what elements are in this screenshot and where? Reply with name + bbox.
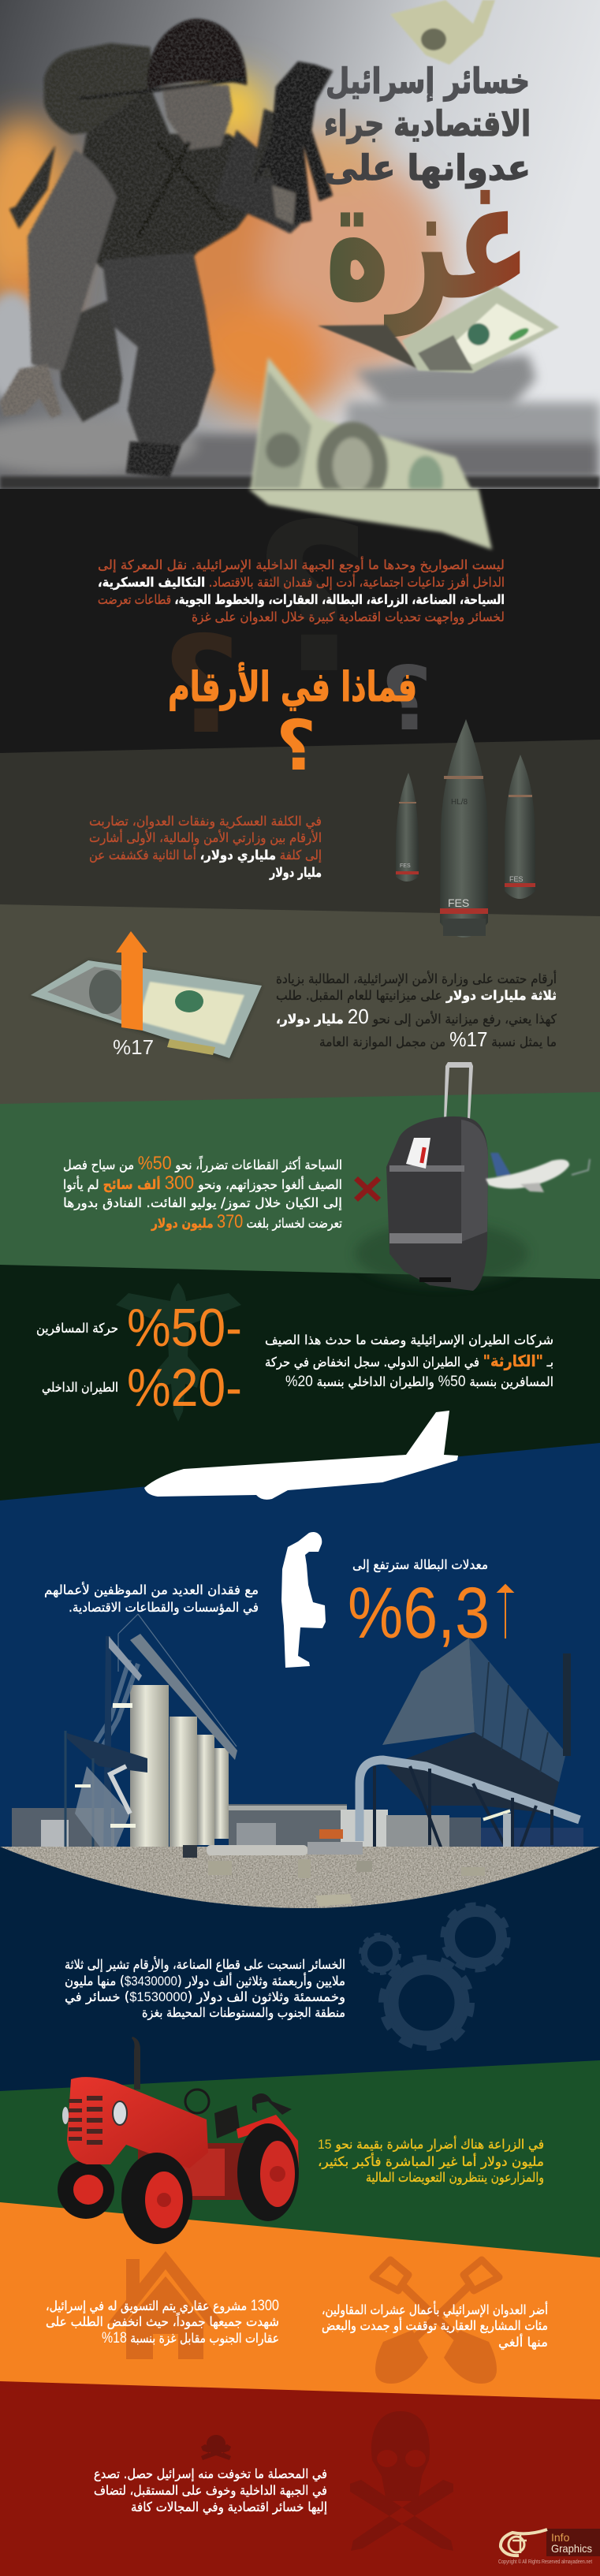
center pipes [183, 1829, 485, 1907]
heading: in numbers: فماذا في الأرقام [168, 662, 417, 711]
gear: top right [444, 1906, 507, 1969]
band: dark olive [0, 740, 600, 923]
stat: passengers -50%: %50- [127, 1298, 242, 1358]
stat: domestic -20%: %20- [127, 1358, 242, 1418]
text: industry: منطقة الجنوب والمستوطنات المحيطة بغزة [142, 2005, 345, 2021]
text: airlines [265, 1333, 553, 1390]
banknote: bottom [248, 356, 473, 489]
logo: infographics box [546, 2529, 600, 2556]
text: agriculture: والمزارعون ينتظرون التعويضات المالية [366, 2170, 544, 2186]
title [324, 62, 531, 336]
stat: domestic -20%: الطيران الداخلي [42, 1380, 118, 1396]
icon: up arrow [116, 931, 147, 1031]
band: navy [0, 1443, 600, 1853]
gear: small [361, 1935, 399, 1973]
text: agriculture [318, 2135, 544, 2186]
banknote: top [390, 0, 495, 65]
icon: gears [361, 1906, 507, 2046]
icon: ghost skull large [350, 2411, 453, 2551]
shell: center: HL/8 [451, 798, 468, 807]
text: conclusion: في المحصلة ما تخوفت منه إسرائيل حصل. تصدع [94, 2466, 327, 2482]
text: military cost: الأرقام بين وزارتي الأمن والمالية، الأولى أشارت [89, 829, 322, 846]
logo: infographics box: Graphics [551, 2542, 592, 2555]
band: olive [0, 904, 600, 1112]
band: dark red [0, 2381, 600, 2576]
banknote: bottom tail [248, 489, 492, 550]
stat: passengers -50%: حركة المسافرين [36, 1321, 118, 1336]
image: industrial plant [0, 1614, 600, 1908]
title: خسائر إسرائيل [326, 62, 530, 102]
text: airlines: شركات الطيران الإسرائيلية وصفت ما حدث هذا الصيف [265, 1333, 553, 1348]
text: real estate [46, 2298, 279, 2347]
icon: red tractor [58, 2037, 299, 2244]
shell: center [440, 719, 488, 938]
icon: question mark: ؟ [276, 705, 316, 786]
ground and smoke [0, 292, 600, 481]
band: green [0, 1092, 600, 1293]
gravel ground [0, 1847, 600, 1908]
shell: right: FES [509, 875, 524, 883]
shovel: right grip to left blade [375, 2260, 499, 2384]
shell: center: FES [448, 897, 469, 909]
tank [355, 355, 536, 406]
decorative question marks: ؟ [252, 481, 371, 719]
intro text: لخسائر وواجهت تحديات اقتصادية كبيرة خلال العدوان على غزة [192, 610, 505, 625]
band: forest green [0, 2060, 600, 2271]
shell: left [396, 773, 419, 882]
logo: calligraphic emblem [501, 2529, 547, 2555]
icon: thin up arrow [498, 1585, 512, 1638]
icon: flat banknote [31, 960, 262, 1061]
icon: white airplane [144, 1411, 458, 1500]
icon: artillery shells [396, 719, 535, 938]
text: employees: مع فقدان العديد من الموظفين لأعمالهم [44, 1582, 259, 1598]
intro text: السياحة، الصناعة، الزراعة، البطالة، العقارات، والخطوط الجوية، قطاعات تعرضت [98, 592, 505, 608]
shell: left: FES [400, 863, 411, 869]
right cooler [360, 1638, 580, 1855]
text: agriculture: في الزراعة هناك أضرار مباشرة بقيمة نحو 15 [318, 2135, 544, 2153]
icon: crossed shovels [373, 2260, 499, 2384]
icon: ghost plane [116, 1283, 241, 1422]
intro text: الداخل أفرز تداعيات اجتماعية، أدت إلى فقدان الثقة بالاقتصاد. التكاليف العسكرية، [98, 573, 505, 591]
text: tourism [63, 1153, 342, 1232]
text: real estate: 1300 مشروع عقاري يتم التسويق له في إسرائيل، [46, 2298, 279, 2314]
icon: ghost house [109, 2251, 222, 2359]
soldier [0, 19, 333, 477]
banknote: middle [318, 286, 559, 373]
text: industry: وخمسمئة وثلاثون الف دولار (1530000$) خسائر في [65, 1989, 345, 2005]
text: contractors: أضر العدوان الإسرائيلي بأعمال عشرات المقاولين، [322, 2301, 548, 2318]
text: budget [276, 970, 557, 1051]
intro text [98, 556, 505, 625]
explosion [0, 75, 445, 418]
icon: suitcase [355, 1062, 528, 1291]
stat: 6.3 percent: %6,3 [348, 1573, 490, 1653]
shell: right [505, 755, 535, 899]
text: military cost: مليار دولار [269, 865, 322, 881]
label: 17 percent: %17 [113, 1035, 154, 1059]
band: dark navy [0, 1847, 600, 2099]
background: black intro band [0, 0, 600, 788]
shovel: left grip to right blade [373, 2260, 497, 2384]
text: industry [65, 1956, 345, 2021]
title: عدوانها على [324, 148, 531, 188]
icon: sad man silhouette [281, 1532, 326, 1668]
text: real estate: عقارات الجنوب مقابل غزة بنسبة 18% [102, 2330, 279, 2347]
text: contractors [322, 2301, 548, 2350]
decorative question marks: ؟ [162, 608, 240, 764]
icon: airplane photo [486, 1153, 590, 1192]
text: employees: في المؤسسات والقطاعات الاقتصادية. [69, 1600, 259, 1616]
text: unemployment label: معدلات البطالة سترتفع إلى [352, 1557, 488, 1573]
background pipework [12, 1804, 583, 1851]
text: budget: أرقام حتمت على وزارة الأمن الإسرائيلية، المطالبة بزيادة [276, 970, 557, 987]
text: tourism: السياحة أكثر القطاعات تضرراً، نحو 50% من سياح فصل [63, 1153, 342, 1174]
text: conclusion: في الجبهة الداخلية وخوف على المستقبل، لتضاف [94, 2483, 327, 2499]
text: conclusion: إليها خسائر اقتصادية وفي المجالات كافة [131, 2500, 327, 2515]
decorative question marks [162, 481, 432, 764]
text: tourism: إلى الكيان خلال تموز/ يوليو الفائت. الفنادق بدورها [63, 1195, 342, 1211]
text: military cost [89, 814, 322, 881]
stat: domestic -20% [42, 1358, 242, 1418]
text: tourism: تعرضت لخسائر بلغت 370 مليون دولار [151, 1211, 342, 1232]
text: agriculture: مليون دولار أما غير المباشرة فأكبر بكثير، [318, 2153, 544, 2170]
text: industry: الخسائر انسحبت على قطاع الصناعة، والأرقام تشير إلى ثلاثة [65, 1956, 345, 1973]
text: employees [44, 1582, 259, 1616]
left tower [65, 1614, 237, 1862]
band: dark green [0, 1265, 600, 1506]
text: conclusion [94, 2466, 327, 2515]
logo: infographics box: Info [551, 2531, 570, 2544]
text: tourism: الصيف ألغوا حجوزاتهم، ونحو 300 ألف سائح لم يأتوا [63, 1172, 342, 1194]
gear: large [383, 1959, 470, 2046]
text: real estate: شهدت جميعها جموداً، حيث انخفض الطلب على [46, 2312, 279, 2330]
text: airlines: المسافرين بنسبة 50% والطيران الداخلي بنسبة 20% [285, 1374, 553, 1390]
text: airlines: بـ "الكارثة" في الطيران الدولي. سجل انخفاض في حركة [265, 1351, 553, 1370]
intro text: ليست الصواريخ وحدها ما أوجع الجبهة الداخلية الإسرائيلية. نقل المعركة إلى [98, 556, 505, 573]
text: budget: ثلاثة مليارات دولار على ميزانيتها للعام المقبل. طلب [276, 988, 557, 1004]
text: contractors: منها ألغي [498, 2333, 548, 2350]
icon: red cross [354, 1176, 381, 1202]
title: الاقتصادية جراء [324, 104, 531, 144]
band: orange [0, 2202, 600, 2405]
text: budget: ما يمثل نسبة 17% من مجمل الموازنة العامة [319, 1027, 557, 1051]
decorative question marks: ؟ [381, 648, 432, 751]
text: military cost: إلى كلفة ملياري دولار، أما الثانية فكشفت عن [89, 846, 322, 863]
text: contractors: مئات المشاريع العقارية توقفت أو جمدت والبعض [322, 2317, 548, 2334]
hero illustration [0, 0, 600, 520]
text: budget: كهذا يعني، رفع ميزانية الأمن إلى نحو 20 مليار دولار، [276, 1005, 557, 1028]
text: military cost: في الكلفة العسكرية ونفقات العدوان، تضاربت [89, 814, 322, 829]
stat: passengers -50% [36, 1298, 242, 1358]
icon: ghost skull small [201, 2435, 231, 2460]
text: industry: ملايين وأربعمئة وثلاثين ألف دولار (3430000$) منها مليون [65, 1972, 345, 1989]
